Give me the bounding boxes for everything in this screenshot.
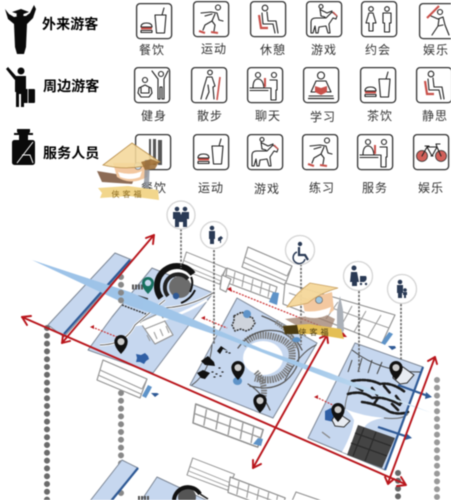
pin: teal: [142, 277, 154, 294]
map: axonometric site plan: [22, 201, 437, 500]
icon: entertainment: [420, 4, 451, 39]
label: 休憩: 休憩: [260, 42, 286, 57]
lower block sculpture: [138, 487, 208, 500]
label: 游戏: 游戏: [311, 43, 337, 57]
light blue view axis: [32, 260, 432, 413]
location pins: [114, 277, 403, 422]
heading: 外来游客: 外来游客: [42, 16, 98, 32]
icon: sport: [194, 2, 229, 37]
block 1 paths and dark sculpture: [100, 266, 213, 364]
building: lower ribbed: [193, 404, 263, 447]
mascot face: [302, 292, 334, 318]
icon: practice: [303, 135, 338, 170]
heading: 周边游客: 周边游客: [43, 78, 99, 94]
dotted column: over axis: [118, 277, 124, 302]
label: 餐饮: 餐饮: [141, 180, 167, 195]
label: 茶饮: 茶饮: [367, 108, 393, 123]
building: bottom solid: [187, 458, 234, 490]
building: top right solid block: [242, 247, 292, 285]
label: 学习: 学习: [310, 109, 336, 124]
icon: dining: [137, 4, 172, 39]
block 2 swirl landscape: [192, 310, 316, 410]
dotted column: far right: [434, 380, 440, 500]
icon: dining (staff): [136, 135, 171, 170]
axis: north-west: [62, 235, 154, 343]
building: bottom ribbed: [228, 477, 285, 500]
watermark: mascot one: [97, 143, 160, 200]
icon: meditate: [417, 68, 451, 103]
buildings: [97, 247, 395, 500]
heading: 服务人员: 服务人员: [43, 145, 99, 161]
blue entry block: [325, 408, 340, 422]
panel: block 1: [88, 268, 213, 373]
dotted column: mid left: [118, 393, 124, 500]
watermark: mascot two: [283, 283, 344, 339]
dashed route: block 3: [314, 395, 337, 407]
mascot sword: [337, 296, 344, 336]
icon: play: [307, 2, 342, 37]
icon: bicycle: [414, 135, 449, 170]
icon grid: third row: [136, 135, 449, 196]
icon: service: [358, 135, 393, 170]
row label: nearby visitors: [6, 67, 99, 107]
panel: lower strip: [90, 460, 138, 500]
pin: block 1: [114, 335, 128, 354]
mascot hat: [103, 143, 160, 168]
label: 娱乐: 娱乐: [418, 181, 444, 195]
panel: block 2: [190, 298, 317, 418]
label: 运动: 运动: [198, 181, 224, 195]
mascot cloak: [97, 171, 135, 184]
building: lower left solid: [97, 360, 147, 398]
axis: central: [253, 335, 328, 468]
circle icon: couple: [167, 201, 195, 229]
dark planted grid: [347, 425, 395, 468]
label: 约会: 约会: [365, 42, 391, 57]
icon: play (staff): [248, 135, 283, 170]
icon: uniformed guard: [12, 129, 35, 165]
pin: block 3 lower: [331, 403, 345, 422]
label: 餐饮: 餐饮: [139, 42, 165, 57]
pin: block 2 upper: [231, 361, 245, 380]
block 3 landscape: [322, 350, 432, 470]
building: long ribbed east: [283, 283, 395, 343]
building: top solid block: [181, 252, 226, 284]
blue star plaza: [136, 353, 149, 364]
panel: block 3: [308, 343, 423, 470]
building: small block edge: [220, 275, 231, 292]
arrow: dark blue upper: [398, 385, 432, 399]
white road: [342, 409, 384, 455]
building: ribbed north: [225, 268, 277, 300]
icon: graduate silhouette: [5, 5, 36, 54]
panel: lower block: [141, 477, 208, 500]
pin: block 2 lower: [253, 394, 267, 413]
entrance: south west: [142, 385, 159, 398]
building: bottom corner: [292, 492, 322, 500]
label: 聊天: 聊天: [255, 109, 281, 123]
mascot face: [113, 162, 149, 182]
label: 服务: 服务: [362, 180, 388, 195]
icon grid: second row: [135, 68, 451, 124]
mascot robe: [285, 314, 335, 333]
grey rock cluster: [232, 312, 255, 331]
red circulation axes: [22, 235, 437, 486]
circle icon: person and dog: [200, 222, 228, 248]
icon: sport (staff): [194, 135, 229, 170]
mascot banner: 侠客福: [112, 189, 144, 199]
dashed route: north: [227, 287, 347, 337]
icon: walk: [192, 68, 227, 103]
row label: service staff: [12, 129, 99, 165]
blue water blobs: [233, 310, 301, 385]
label: 游戏: 游戏: [254, 182, 280, 196]
dashed route: block 2: [201, 316, 227, 328]
icon: chat: [248, 68, 283, 103]
label: 散步: 散步: [197, 108, 223, 123]
dark blue edge: [385, 367, 423, 470]
label: 娱乐: 娱乐: [423, 43, 449, 57]
icon: traveller with suitcase: [6, 67, 35, 107]
circle icon: parent and child: [388, 274, 416, 304]
icon: rest: [251, 2, 286, 37]
icon grid: first row: [137, 2, 451, 57]
icon: fitness: [135, 68, 170, 103]
label: 运动: 运动: [201, 42, 227, 56]
black planting chains: [348, 380, 408, 414]
black landscape blobs: [197, 346, 228, 379]
arrow: dark blue lower: [378, 427, 412, 440]
dashed route: block 1: [90, 325, 117, 337]
entrance: east: [381, 332, 396, 350]
circle icon: mother with pram: [344, 262, 372, 290]
mascot sword: [144, 160, 150, 192]
mascot banner: 侠客福: [298, 327, 332, 337]
circle icon: wheelchair: [286, 236, 314, 264]
mascot hat: [287, 283, 338, 307]
label: 练习: 练习: [309, 180, 335, 195]
dotted column: far left: [44, 328, 50, 500]
row label: visitors from outside: [5, 5, 98, 54]
label: 静思: 静思: [422, 109, 448, 123]
icon: date: [362, 2, 397, 37]
user type circles: [167, 201, 416, 304]
axis: long diagonal: [22, 316, 406, 486]
dotted column: right inner: [395, 473, 401, 500]
icon: study: [304, 68, 339, 103]
axis: east: [385, 357, 437, 484]
icon: tea: [361, 68, 396, 103]
dashed leader lines: [181, 229, 401, 372]
small building in block 1: [140, 313, 173, 344]
label: 健身: 健身: [141, 108, 167, 123]
entrance: south: [253, 438, 263, 446]
pin: block 3 upper: [389, 361, 403, 380]
small blue entrances and arrows: [142, 292, 396, 446]
entrance: north: [269, 292, 279, 305]
panel: left strip: [48, 253, 132, 337]
